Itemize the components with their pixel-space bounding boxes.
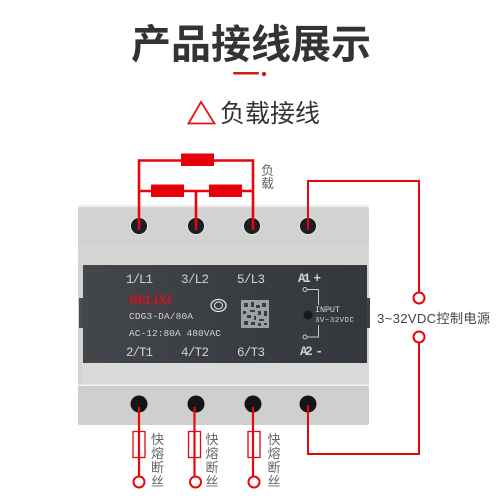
input knob bbox=[304, 310, 312, 320]
load wiring bbox=[139, 154, 253, 230]
fuse label 3: 断 bbox=[268, 460, 281, 475]
load label: 负 bbox=[261, 163, 274, 178]
control voltage label: 3~32VDC控制电源 bbox=[377, 311, 490, 326]
dark label panel bbox=[83, 265, 367, 363]
fuse 2 bbox=[188, 407, 201, 488]
icon: CCC mark bbox=[211, 300, 226, 312]
terminal holes top bbox=[130, 218, 316, 234]
brand logo: DELIXI bbox=[129, 293, 172, 307]
load label: 载 bbox=[261, 176, 274, 191]
input text: INPUT bbox=[315, 305, 340, 315]
control wiring bbox=[308, 181, 419, 454]
terminal holes bottom bbox=[130, 396, 316, 412]
QR code bbox=[241, 300, 269, 328]
subtitle: 负载接线 bbox=[220, 100, 320, 128]
terminal labels: 2/T1 bbox=[126, 346, 153, 360]
input text bbox=[315, 305, 354, 325]
fuse label 1: 快 bbox=[151, 432, 164, 447]
terminal labels: 3/L2 bbox=[181, 273, 209, 287]
fuse 1 bbox=[133, 407, 145, 488]
terminal labels: 4/T2 bbox=[181, 346, 209, 360]
input bracket bbox=[303, 288, 318, 339]
fuse label 1: 熔 bbox=[151, 446, 164, 461]
relay device bbox=[78, 205, 370, 425]
model text: CDG3-DA/80A bbox=[129, 311, 193, 322]
model text bbox=[129, 311, 221, 339]
side clips bbox=[79, 298, 84, 328]
control terminals bbox=[414, 292, 424, 342]
input text: 3V~32VDC bbox=[315, 317, 354, 325]
terminal labels: A2 - bbox=[300, 345, 323, 359]
title: 产品接线展示 bbox=[131, 23, 371, 67]
fuse label 1: 断 bbox=[151, 460, 164, 475]
fuse 3 bbox=[248, 407, 260, 488]
title accent bbox=[233, 72, 266, 76]
terminal labels: 6/T3 bbox=[237, 346, 265, 360]
fuse label 3: 丝 bbox=[268, 474, 281, 489]
load resistors bbox=[151, 154, 242, 197]
fuse label 3: 熔 bbox=[268, 446, 281, 461]
fuse label 1: 丝 bbox=[151, 474, 164, 489]
fuse label 2: 熔 bbox=[206, 446, 219, 461]
terminal labels: 5/L3 bbox=[237, 273, 265, 287]
model text: AC-12:80A 480VAC bbox=[129, 328, 221, 339]
load label bbox=[261, 163, 274, 191]
icon: triangle bbox=[188, 102, 214, 124]
fuse label 2 bbox=[206, 432, 219, 489]
fuse label 3: 快 bbox=[268, 432, 281, 447]
fuse label 3 bbox=[268, 432, 281, 489]
device body bbox=[78, 207, 369, 425]
fuse label 2: 快 bbox=[206, 432, 219, 447]
terminal labels: 1/L1 bbox=[126, 273, 153, 287]
terminal labels: A1 + bbox=[298, 272, 321, 286]
fuse label 2: 丝 bbox=[206, 474, 219, 489]
terminal labels bbox=[126, 272, 323, 360]
fuse label 1 bbox=[151, 432, 164, 489]
fuse label 2: 断 bbox=[206, 460, 219, 475]
